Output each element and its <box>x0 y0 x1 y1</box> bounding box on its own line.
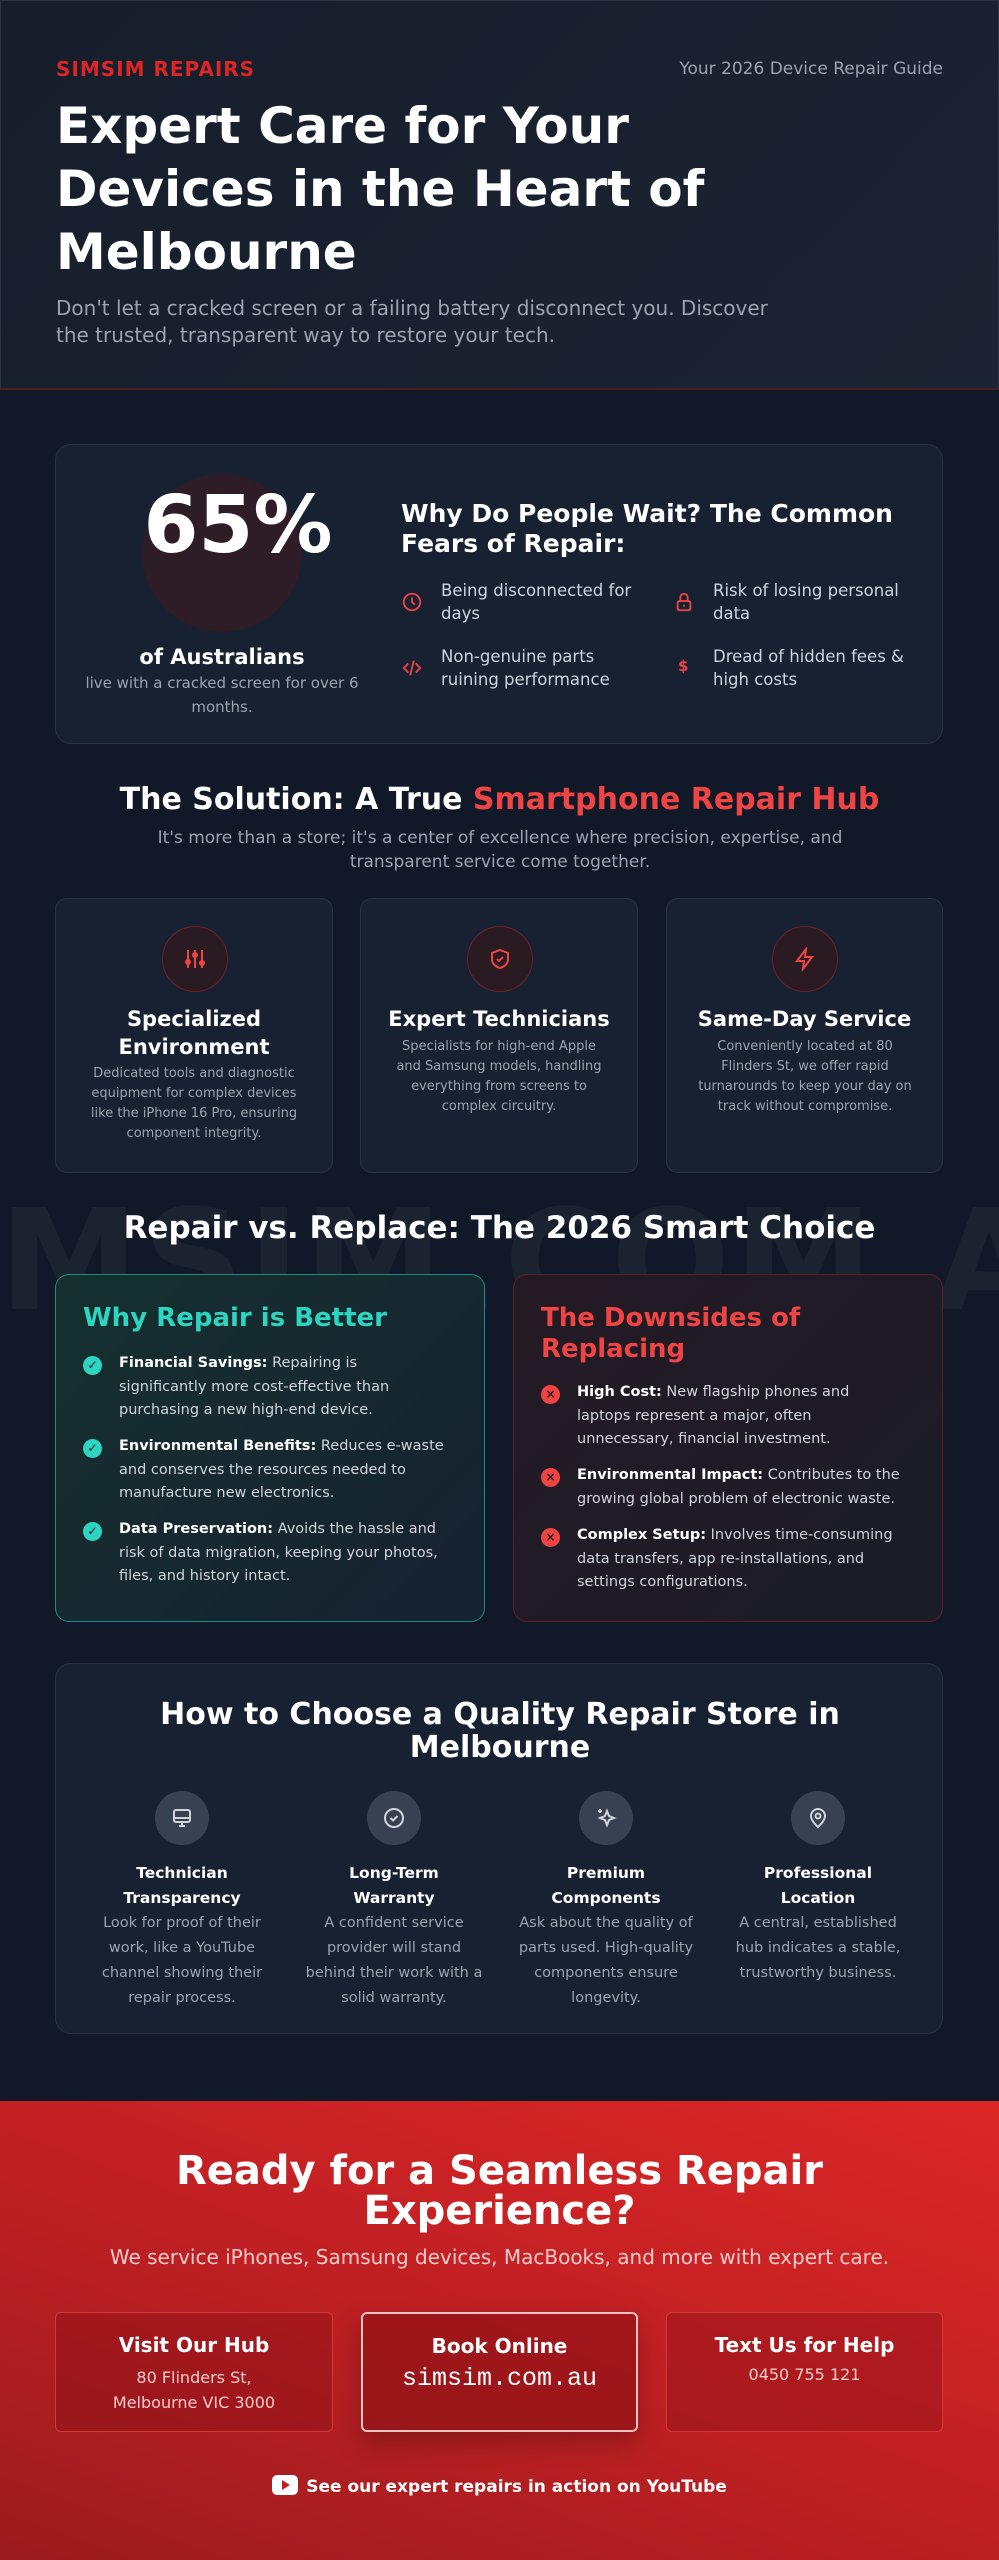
card: expert technicians: Expert Technicians <box>388 1007 610 1031</box>
panel: downsides <box>513 1274 943 1622</box>
solution subtitle: It's more than a store; it's a center of excellence where precision, expertise, and transparent service come together. <box>158 828 842 872</box>
item: transparency: Look for proof of their work, like a YouTube channel showing their repair process. <box>102 1915 262 2006</box>
button: visit <box>55 2312 333 2432</box>
youtube link: See our expert repairs in action on YouTube <box>306 2477 727 2497</box>
title: Expert Care for Your Devices in the Heart of Melbourne <box>56 97 704 281</box>
button: visit: Melbourne VIC 3000 <box>113 2393 275 2412</box>
card: expert technicians <box>360 898 638 1173</box>
panel: how to choose <box>55 1663 943 2034</box>
CTA subtitle: We service iPhones, Samsung devices, MacBooks, and more with expert care. <box>110 2245 889 2269</box>
CTA section <box>0 2101 999 2560</box>
fears heading: Why Do People Wait? The Common Fears of Repair: <box>401 499 893 558</box>
card: specialized environment: Dedicated tools and diagnostic equipment for complex devices like the iPhone 16 Pro, ensuring component integrity. <box>91 1066 297 1141</box>
panel: downsides: The Downsides of Replacing <box>541 1303 800 1364</box>
icon: shield <box>467 926 533 992</box>
fear: fees: $ <box>678 657 688 675</box>
item: data: ✓ <box>87 1524 98 1538</box>
item: components: Premium Components <box>551 1864 661 1907</box>
button: book: Book Online <box>432 2334 567 2358</box>
item: impact: Environmental Impact: Contributes to the growing global problem of electronic waste. <box>577 1467 900 1506</box>
stat desc: live with a cracked screen for over 6 months. <box>85 674 359 716</box>
header <box>0 0 999 390</box>
button: text: 0450 755 121 <box>749 2365 860 2384</box>
icon: sliders <box>162 926 228 992</box>
subtitle: Don't let a cracked screen or a failing battery disconnect you. Discover the trusted, transparent way to restore your tech. <box>56 296 768 347</box>
card: same-day: Same-Day Service <box>698 1007 911 1031</box>
CTA heading: Experience? <box>364 2188 635 2234</box>
card: specialized environment <box>55 898 333 1173</box>
item: warranty: A confident service provider will stand behind their work with a solid warranty. <box>306 1915 482 2006</box>
item: impact: × <box>545 1470 556 1484</box>
fear: data: Risk of losing personal data <box>713 581 899 623</box>
item: warranty: Long-Term Warranty <box>349 1864 439 1907</box>
item: cost: High Cost: New flagship phones and laptops represent a major, often unnecessary, financial investment. <box>577 1384 849 1447</box>
item: components: Ask about the quality of parts used. High-quality components ensure longevity. <box>519 1915 693 2006</box>
item: location <box>736 1791 900 1981</box>
guide label: Your 2026 Device Repair Guide <box>679 59 943 79</box>
button: visit: Visit Our Hub <box>119 2333 269 2357</box>
card: same-day: Conveniently located at 80 Flinders St, we offer rapid turnarounds to keep your day on track without compromise. <box>698 1039 912 1114</box>
solution heading: The Solution: A True Smartphone Repair Hub <box>120 782 879 817</box>
item: location: Professional Location <box>764 1864 872 1907</box>
fear: disconnected: Being disconnected for days <box>441 581 631 623</box>
item: environment: ✓ <box>87 1441 98 1455</box>
button: book <box>361 2312 638 2432</box>
button: text: Text Us for Help <box>715 2333 894 2357</box>
button: book: simsim.com.au <box>402 2364 597 2393</box>
CTA heading <box>176 2148 823 2234</box>
fear: fees: Dread of hidden fees & high costs <box>713 647 904 689</box>
icon: bolt <box>772 926 838 992</box>
panel: why repair: Why Repair is Better <box>83 1303 387 1333</box>
item: warranty <box>306 1791 482 2006</box>
item: transparency: Technician Transparency <box>123 1864 241 1907</box>
panel: stat and fears <box>55 444 943 744</box>
item: environment: Environmental Benefits: Reduces e-waste and conserves the resources needed to manufacture new electronics. <box>119 1438 444 1501</box>
fear: parts: Non-genuine parts ruining performance <box>441 647 610 689</box>
card: specialized environment: Specialized Environment <box>118 1007 270 1059</box>
item: transparency <box>102 1791 262 2006</box>
button: text <box>666 2312 943 2432</box>
item: components <box>519 1791 693 2006</box>
repair vs replace heading: Repair vs. Replace: The 2026 Smart Choice <box>124 1210 875 1246</box>
panel: how to choose: How to Choose a Quality Repair Store in Melbourne <box>160 1697 840 1765</box>
item: location: A central, established hub indicates a stable, trustworthy business. <box>736 1915 900 1981</box>
stat circle <box>142 474 302 632</box>
brand: SIMSIM REPAIRS <box>56 57 255 81</box>
item: financial: Financial Savings: Repairing is significantly more cost-effective than purchasing a new high-end device. <box>119 1355 389 1418</box>
card: expert technicians: Specialists for high-end Apple and Samsung models, handling everything from screens to complex circuitry. <box>396 1039 602 1114</box>
item: data: Data Preservation: Avoids the hassle and risk of data migration, keeping your photos, files, and history intact. <box>119 1521 438 1584</box>
stat label: of Australians <box>139 645 305 669</box>
item: cost: × <box>545 1387 556 1401</box>
panel: why repair <box>55 1274 485 1622</box>
card: same-day <box>666 898 943 1173</box>
item: setup: Complex Setup: Involves time-consuming data transfers, app re-installations, and settings configurations. <box>577 1527 893 1590</box>
CTA heading: Ready for a Seamless Repair <box>176 2148 823 2194</box>
item: financial: ✓ <box>87 1358 98 1372</box>
stat number: 65% <box>143 479 333 571</box>
button: visit: 80 Flinders St, <box>136 2368 252 2387</box>
item: setup: × <box>545 1530 556 1544</box>
